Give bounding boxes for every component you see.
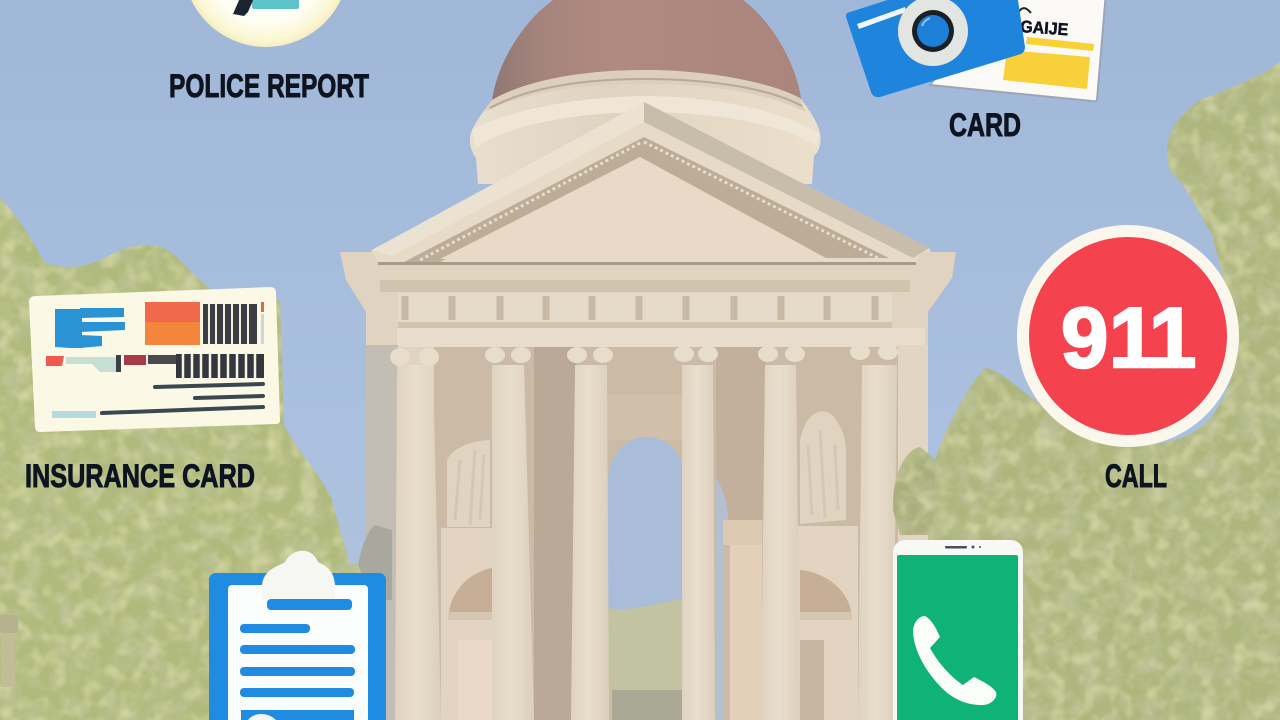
phone handset bbox=[913, 616, 996, 705]
pediment left rake bbox=[372, 102, 644, 256]
icon: 911 emergency circle bbox=[1017, 225, 1239, 447]
distant trees bbox=[608, 598, 683, 720]
right trees bbox=[880, 62, 1280, 720]
lower arches bbox=[449, 568, 492, 612]
foreground foliage bbox=[893, 447, 936, 535]
icon: camera and card bbox=[846, 0, 1106, 101]
right wall bay bbox=[798, 526, 858, 720]
cornice and walls bbox=[340, 252, 956, 720]
label: card: CARD bbox=[949, 107, 1021, 143]
icon: police report badge bbox=[183, 0, 349, 47]
column 2 bbox=[492, 365, 534, 720]
column 4 bbox=[682, 365, 715, 720]
camera bbox=[846, 0, 1025, 97]
drum bbox=[470, 70, 821, 184]
label: police report: POLICE REPORT bbox=[169, 68, 369, 104]
right pier bbox=[730, 540, 762, 720]
capitals bbox=[390, 344, 898, 366]
911 number: 911 bbox=[1061, 291, 1196, 386]
column 5 bbox=[761, 365, 800, 720]
relief panels bbox=[447, 440, 490, 527]
arch soffit bbox=[607, 395, 683, 440]
column 1 bbox=[395, 365, 441, 720]
sky strip bbox=[716, 478, 728, 720]
icon: clipboard bbox=[209, 551, 386, 720]
building bbox=[340, 0, 956, 720]
left side wall bbox=[366, 345, 398, 720]
sculpture left bbox=[358, 525, 392, 600]
id card bbox=[930, 0, 1106, 101]
recess dark bays bbox=[534, 347, 576, 720]
arch opening sky bbox=[608, 437, 683, 720]
left wall bay bbox=[441, 528, 493, 720]
dome bbox=[492, 0, 801, 110]
frieze bbox=[398, 293, 892, 323]
column 3 bbox=[571, 365, 609, 720]
label: call: CALL bbox=[1105, 458, 1167, 494]
tympanum bbox=[440, 157, 826, 259]
label: insurance card: INSURANCE CARD bbox=[25, 458, 255, 494]
column 6 bbox=[858, 365, 897, 720]
dentil band bbox=[404, 137, 889, 262]
portico interior bbox=[434, 347, 898, 720]
id card: GAIJE bbox=[1020, 17, 1069, 39]
icon: smartphone bbox=[893, 540, 1023, 720]
left trees bbox=[0, 198, 400, 720]
lamp post bbox=[0, 615, 18, 687]
icon: insurance card bbox=[29, 287, 280, 432]
pediment shaded right rake bbox=[644, 102, 929, 258]
pediment bbox=[360, 102, 940, 270]
right side wall bbox=[896, 345, 928, 555]
